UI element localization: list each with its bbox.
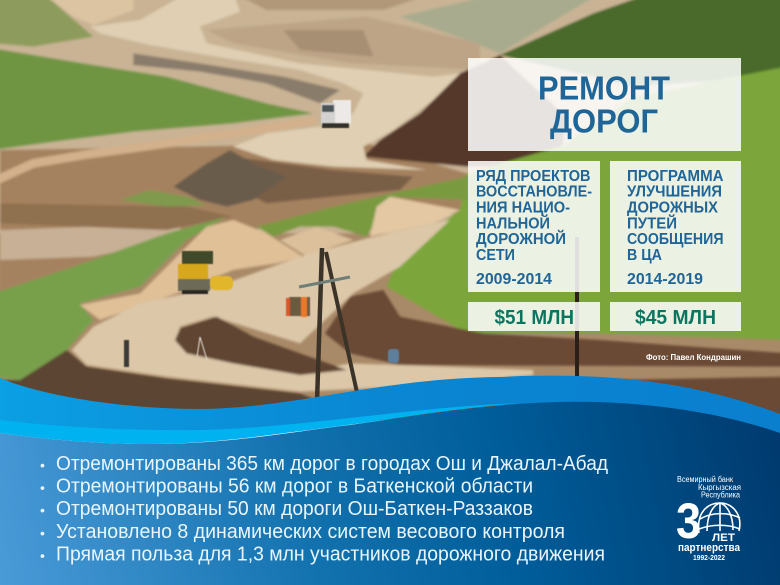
panel: Central Asia road program: ПУТЕЙ — [627, 214, 677, 232]
World Bank 30 years logo — [676, 475, 741, 562]
World Bank 30 years logo: Всемирный банк — [677, 475, 733, 484]
photo credit: Фото: Павел Кондрашин — [646, 352, 741, 362]
panel: Central Asia road program: СООБЩЕНИЯ — [627, 231, 724, 248]
World Bank 30 years logo: ЛЕТ — [712, 532, 735, 544]
panel: national road network project — [468, 161, 600, 292]
panel: Central Asia road program: ПРОГРАММА — [627, 168, 724, 185]
panel: national road network project: НИЯ НАЦИО- — [476, 199, 570, 216]
World Bank 30 years logo: партнерства — [678, 542, 741, 554]
amount: $45 million — [610, 302, 741, 331]
dark blue footer panel — [0, 395, 780, 585]
World Bank 30 years logo: Кыргызская — [698, 483, 741, 492]
small vehicle with workers — [286, 297, 310, 317]
results bullet list: Прямая польза для 1,3 млн участников дорожного движения — [56, 544, 605, 566]
panel: national road network project: ВОССТАНОВЛЕ- — [476, 184, 592, 201]
icon: globe — [699, 503, 740, 533]
panel: national road network project: НАЛЬНОЙ — [476, 214, 550, 232]
dump truck — [321, 100, 351, 128]
panel: national road network project: 2009-2014 — [476, 271, 553, 288]
utility poles — [299, 237, 577, 402]
panel: Central Asia road program: УЛУЧШЕНИЯ — [627, 184, 722, 201]
panel: Central Asia road program: 2014-2019 — [627, 271, 703, 288]
panel: national road network project: ДОРОЖНОЙ — [476, 230, 566, 248]
panel: Central Asia road program — [610, 161, 741, 292]
amount: $51 million: $51 МЛН — [494, 307, 574, 329]
title panel: РЕМОНТ — [538, 70, 670, 106]
amount: $45 million: $45 МЛН — [635, 307, 716, 329]
panel: national road network project: РЯД ПРОЕКТОВ — [476, 168, 590, 185]
standing surveyor — [124, 337, 207, 367]
seated worker — [388, 349, 399, 363]
amount: $51 million — [468, 302, 600, 331]
World Bank 30 years logo: Республика — [701, 490, 740, 500]
panel: Central Asia road program: В ЦА — [627, 247, 662, 264]
bright cyan wave band — [0, 403, 520, 444]
title panel — [468, 58, 741, 151]
World Bank 30 years logo: 1992-2022 — [693, 553, 725, 562]
road construction photo background — [0, 0, 780, 420]
results bullet list: • — [40, 502, 45, 518]
yellow road roller — [178, 251, 233, 294]
results bullet list — [40, 453, 608, 566]
results bullet list: • — [40, 457, 45, 473]
World Bank 30 years logo: 3 — [676, 493, 701, 549]
panel: national road network project: СЕТИ — [476, 247, 515, 264]
results bullet list: • — [40, 480, 45, 496]
results bullet list: Отремонтированы 50 км дороги Ош-Баткен-Раззаков — [56, 498, 533, 520]
results bullet list: Отремонтированы 56 км дорог в Баткенской области — [56, 476, 533, 498]
results bullet list: • — [40, 525, 45, 541]
results bullet list: Отремонтированы 365 км дорог в городах Ош и Джалал-Абад — [56, 453, 608, 475]
mid blue wave band — [0, 376, 780, 436]
footer wave background — [0, 376, 780, 585]
results bullet list: Установлено 8 динамических систем весового контроля — [56, 521, 565, 543]
panel: Central Asia road program: ДОРОЖНЫХ — [627, 199, 719, 216]
title panel: ДОРОГ — [550, 102, 658, 140]
results bullet list: • — [40, 548, 45, 564]
